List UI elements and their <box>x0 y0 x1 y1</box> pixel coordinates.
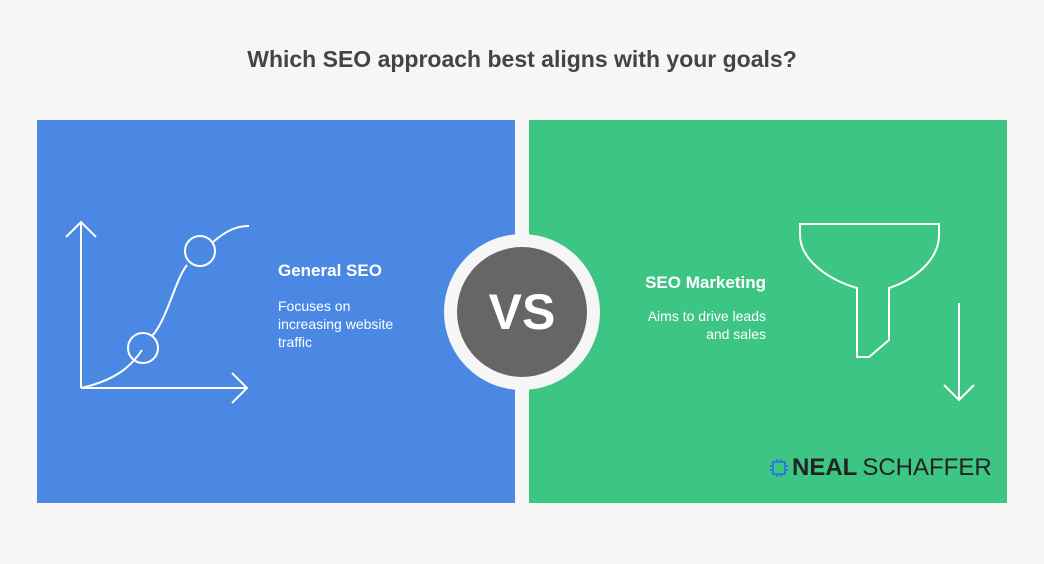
icon: growth chart <box>65 220 249 404</box>
icon: funnel and arrow <box>799 223 975 402</box>
logo: Neal Schaffer <box>770 454 992 481</box>
logo: Neal Schaffer: NEAL <box>792 454 857 481</box>
text: SEO marketing description <box>648 308 766 342</box>
heading: General SEO: General SEO <box>278 261 382 280</box>
VS badge <box>444 234 600 390</box>
logo: Neal Schaffer: SCHAFFER <box>862 454 992 481</box>
heading: SEO Marketing: SEO Marketing <box>645 273 766 292</box>
panel: SEO marketing <box>529 120 1007 503</box>
title: Which SEO approach best aligns with your goals? <box>247 46 797 72</box>
VS badge: VS <box>489 284 555 340</box>
text: SEO marketing description: Aims to drive leads <box>648 308 766 324</box>
text: SEO marketing description: and sales <box>706 326 766 342</box>
text: general SEO description: Focuses on increasing website traffic <box>278 298 393 350</box>
panel: general SEO <box>37 120 515 503</box>
